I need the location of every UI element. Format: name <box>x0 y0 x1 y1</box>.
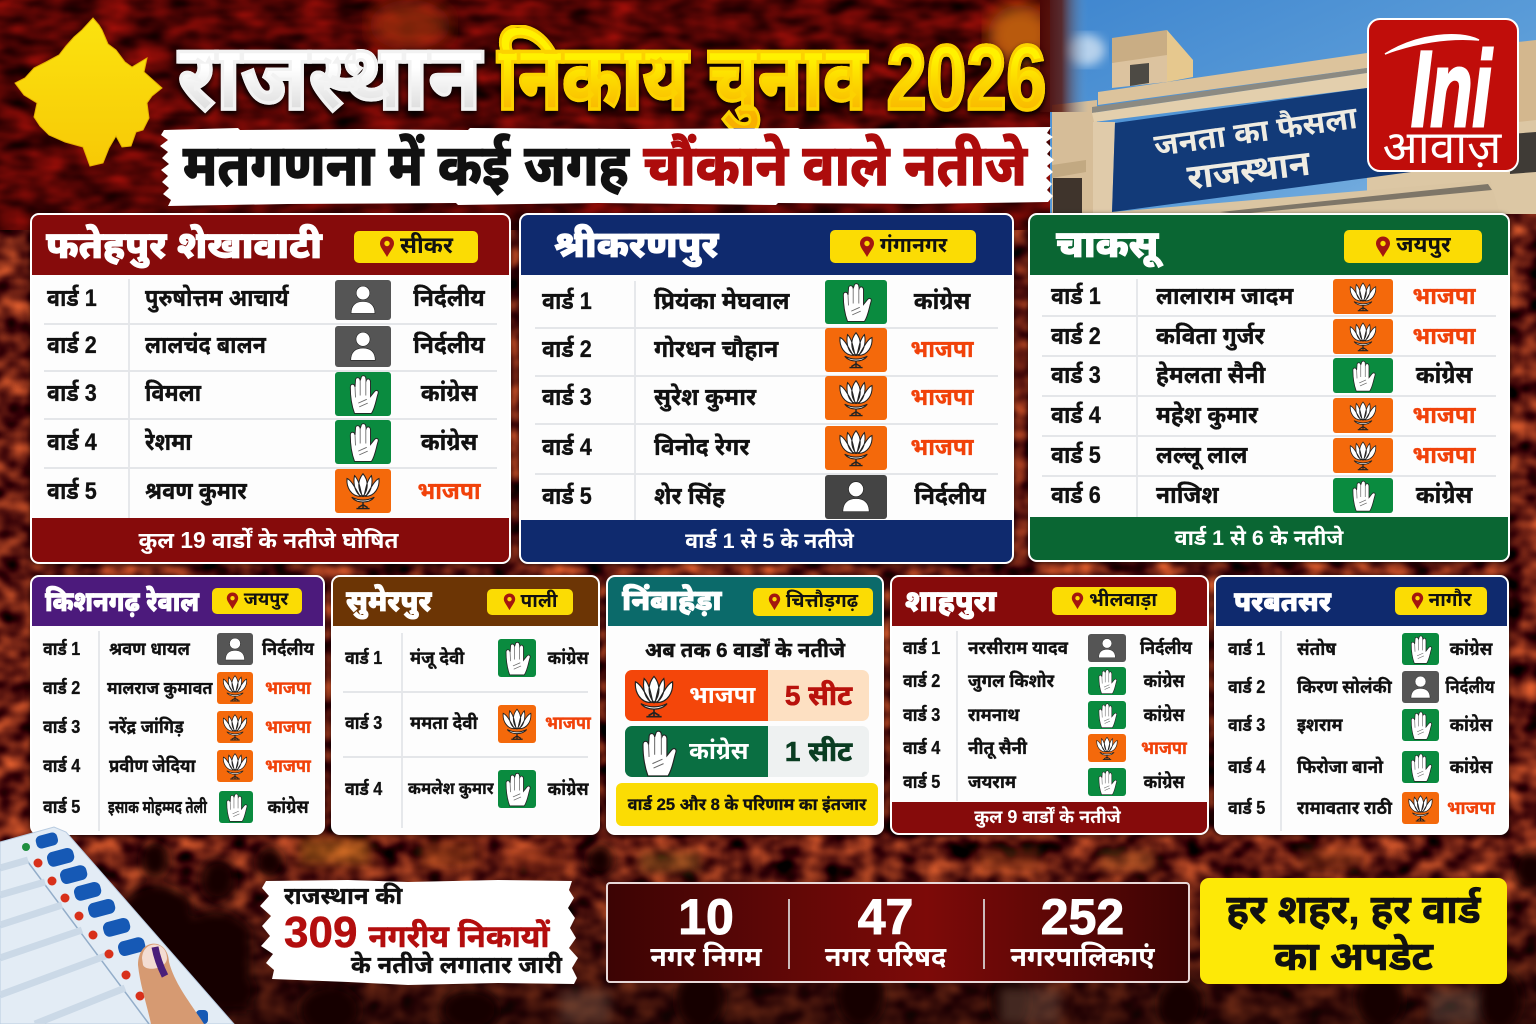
row: वार्ड 1 <box>1228 639 1265 659</box>
row: निर्दलीय <box>413 332 485 359</box>
stat: municipal corporations: 10 <box>678 889 734 945</box>
callout: every city every ward: हर शहर, हर वार्ड <box>1226 888 1481 932</box>
row: वार्ड 2 <box>903 671 940 691</box>
panel: Fatehpur Shekhawati <box>30 213 511 564</box>
row: सुरेश कुमार <box>654 384 756 411</box>
row: वार्ड 1 <box>542 288 592 315</box>
logo: Tni Awaaz: Ini <box>1411 30 1493 150</box>
footer: वार्ड 1 से 5 के नतीजे <box>685 529 854 553</box>
row: कमलेश कुमार <box>408 779 494 798</box>
stat: municipal corporations <box>608 884 804 972</box>
row <box>1228 709 1493 741</box>
row: कांग्रेस <box>1450 757 1492 777</box>
row: भाजपा <box>417 478 481 505</box>
row <box>46 372 478 416</box>
row <box>542 426 974 470</box>
row: वार्ड 2 <box>47 332 97 359</box>
row: श्रवण धायल <box>109 639 190 659</box>
row <box>42 750 312 782</box>
row: विमला <box>145 380 201 407</box>
row: कांग्रेस <box>547 779 589 799</box>
location tag: पाली <box>521 590 557 612</box>
row: वार्ड 2 <box>1228 677 1265 697</box>
location tag <box>212 588 302 614</box>
row: कांग्रेस <box>547 648 589 668</box>
row <box>902 701 1185 729</box>
row <box>46 280 486 320</box>
row <box>1050 398 1476 433</box>
callout: 309 urban bodies <box>260 880 578 985</box>
logo: Tni Awaaz <box>1367 18 1519 172</box>
row <box>1050 438 1476 473</box>
row: भाजपा <box>1447 798 1495 818</box>
pending note <box>616 783 878 826</box>
row: इसाक मोहम्मद तेली <box>108 797 207 817</box>
heading: निंबाहेड़ा <box>622 585 722 617</box>
row: निर्दलीय <box>1445 677 1495 697</box>
row <box>1228 633 1493 665</box>
row: भाजपा <box>1412 442 1476 469</box>
row: लल्लू लाल <box>1156 442 1247 469</box>
callout: 309 urban bodies: 309 नगरीय निकायों <box>284 908 550 957</box>
heading <box>1216 577 1507 626</box>
row <box>542 475 986 519</box>
row: जुगल किशोर <box>968 671 1054 691</box>
heading <box>608 577 882 626</box>
row: कांग्रेस <box>1416 482 1472 509</box>
row: वार्ड 4 <box>1228 757 1265 777</box>
stat: municipalities <box>980 884 1185 972</box>
heading <box>521 215 1012 275</box>
row <box>902 667 1185 695</box>
row <box>1050 279 1476 314</box>
row <box>42 791 309 823</box>
row: कांग्रेस <box>421 380 477 407</box>
row <box>42 672 312 704</box>
row: वार्ड 2 <box>1051 323 1101 350</box>
heading <box>32 577 323 626</box>
heading: श्रीकरणपुर <box>554 224 719 265</box>
BJP seats bar <box>625 670 869 721</box>
stat: municipal councils: 47 <box>858 889 913 945</box>
panel: Chaksu <box>1028 213 1510 562</box>
sign text: जनता का फैसला <box>1152 100 1360 163</box>
row: इशराम <box>1297 715 1343 735</box>
row: कविता गुर्जर <box>1156 323 1265 350</box>
row: भाजपा <box>265 678 311 698</box>
location tag: चित्तौड़गढ़ <box>786 590 858 612</box>
row: भाजपा <box>265 717 311 737</box>
row: वार्ड 5 <box>542 483 592 510</box>
row: भाजपा <box>1412 402 1476 429</box>
row: पुरुषोत्तम आचार्य <box>145 285 289 312</box>
row: कांग्रेस <box>267 797 309 817</box>
Congress seats bar: कांग्रेस <box>689 738 749 765</box>
row: वार्ड 4 <box>345 779 382 799</box>
stats box <box>606 882 1190 983</box>
heading: परबतसर <box>1234 586 1331 617</box>
row: वार्ड 4 <box>1051 402 1101 429</box>
location tag: गंगानगर <box>880 234 947 256</box>
row: निर्दलीय <box>914 483 986 510</box>
Congress seats bar: 1 सीट <box>785 736 852 767</box>
callout: every city every ward: का अपडेट <box>1274 935 1433 979</box>
background: sky and building with banner <box>1040 0 1536 214</box>
row: रेशमा <box>145 429 192 456</box>
location tag <box>487 589 573 615</box>
footer <box>521 520 1012 562</box>
callout: every city every ward <box>1200 878 1507 984</box>
row: वार्ड 4 <box>542 434 592 461</box>
row: गोरधन चौहान <box>654 336 778 363</box>
row: वार्ड 3 <box>1228 715 1265 735</box>
row: वार्ड 1 <box>47 285 97 312</box>
location tag: नागौर <box>1429 590 1471 610</box>
row <box>1228 671 1495 703</box>
panel: Sri Karanpur <box>519 213 1014 564</box>
location tag <box>1344 230 1482 263</box>
stat: municipal councils: नगर परिषद <box>825 942 946 972</box>
row <box>46 326 486 367</box>
row: कांग्रेस <box>1143 705 1185 725</box>
heading: शाहपुरा <box>905 585 996 618</box>
row: भाजपा <box>910 384 974 411</box>
row: नाजिश <box>1156 482 1219 509</box>
row <box>1228 751 1493 783</box>
row <box>344 705 592 743</box>
row: लालाराम जादम <box>1156 283 1293 310</box>
row <box>42 633 314 665</box>
row: वार्ड 1 <box>903 638 940 658</box>
heading: फतेहपुर शेखावाटी <box>46 224 322 266</box>
panel: Shahpura <box>890 575 1209 835</box>
row: प्रियंका मेघवाल <box>654 288 790 315</box>
location tag <box>1395 587 1487 615</box>
row: वार्ड 4 <box>47 429 97 456</box>
row: भाजपा <box>1141 738 1187 758</box>
subtitle banner: मतगणना में कई जगह चौंकाने वाले नतीजे <box>183 134 1027 198</box>
title: निकाय चुनाव 2026 <box>497 27 1046 129</box>
row: लालचंद बालन <box>145 332 266 359</box>
location tag: भीलवाड़ा <box>1089 590 1157 610</box>
row <box>46 420 478 464</box>
row: वार्ड 5 <box>1228 798 1265 818</box>
row: भाजपा <box>1412 283 1476 310</box>
location tag <box>753 588 873 616</box>
row <box>1228 792 1496 824</box>
row: कांग्रेस <box>1143 772 1185 792</box>
row: वार्ड 1 <box>345 648 382 668</box>
row: वार्ड 5 <box>47 478 97 505</box>
row <box>902 734 1188 762</box>
row: रामनाथ <box>968 705 1019 725</box>
footer <box>32 518 509 562</box>
row: कांग्रेस <box>1416 362 1472 389</box>
heading <box>333 577 598 626</box>
row: वार्ड 5 <box>43 797 80 817</box>
row <box>344 770 589 808</box>
heading: सुमेरपुर <box>346 585 432 618</box>
heading <box>1030 215 1508 275</box>
stat: municipalities: 252 <box>1041 889 1124 945</box>
BJP seats bar: भाजपा <box>689 682 755 709</box>
row: कांग्रेस <box>421 429 477 456</box>
row: कांग्रेस <box>1450 639 1492 659</box>
row: वार्ड 5 <box>903 772 940 792</box>
pending note: वार्ड 25 और 8 के परिणाम का इंतजार <box>628 795 866 814</box>
location tag: जयपुर <box>244 589 288 609</box>
row: वार्ड 5 <box>1051 442 1101 469</box>
row: नरसीराम यादव <box>968 638 1068 658</box>
stat: municipalities: नगरपालिकाएं <box>1010 942 1155 972</box>
row: वार्ड 6 <box>1051 482 1101 509</box>
panel: Sumerpur <box>331 575 600 835</box>
row: निर्दलीय <box>413 285 485 312</box>
row: निर्दलीय <box>262 639 314 659</box>
row <box>542 376 974 420</box>
row: वार्ड 1 <box>43 639 80 659</box>
sign text: राजस्थान <box>1185 144 1314 197</box>
row: कांग्रेस <box>914 288 970 315</box>
heading: चाकसू <box>1056 224 1158 266</box>
footer: वार्ड 1 से 6 के नतीजे <box>1175 526 1343 550</box>
title <box>173 24 1048 129</box>
row: वार्ड 2 <box>43 678 80 698</box>
row: संतोष <box>1297 639 1336 659</box>
row: प्रवीण जेदिया <box>109 756 195 776</box>
row: भाजपा <box>265 756 311 776</box>
row: वार्ड 2 <box>542 336 592 363</box>
heading <box>32 215 509 275</box>
row: नरेंद्र जांगिड़ <box>109 717 184 737</box>
location tag: जयपुर <box>1396 232 1451 257</box>
row: किरण सोलंकी <box>1297 677 1392 697</box>
footer <box>892 802 1207 833</box>
row: मंजू देवी <box>410 648 464 668</box>
row: हेमलता सैनी <box>1156 362 1265 389</box>
row: भाजपा <box>1412 323 1476 350</box>
row <box>42 711 312 743</box>
row: वार्ड 4 <box>43 756 80 776</box>
row: फिरोजा बानो <box>1297 757 1383 777</box>
icon: EVM machine with finger <box>0 826 235 1024</box>
location tag <box>354 231 478 263</box>
row: महेश कुमार <box>1156 402 1258 429</box>
stat: municipal corporations: नगर निगम <box>650 942 762 972</box>
callout: 309 urban bodies: राजस्थान की <box>284 883 402 910</box>
row: शेर सिंह <box>654 483 725 510</box>
row: भाजपा <box>545 713 591 733</box>
callout: 309 urban bodies: के नतीजे लगातार जारी <box>351 952 562 979</box>
row: भाजपा <box>910 336 974 363</box>
footer <box>1030 517 1508 560</box>
BJP seats bar: 5 सीट <box>785 680 852 711</box>
title: राजस्थान <box>178 27 481 129</box>
location tag <box>830 230 976 263</box>
row: वार्ड 4 <box>903 738 940 758</box>
row: श्रवण कुमार <box>145 478 247 505</box>
row <box>344 639 589 677</box>
row <box>1050 478 1473 513</box>
footer: कुल 9 वार्डों के नतीजे <box>974 807 1121 827</box>
row: वार्ड 3 <box>903 705 940 725</box>
row: वार्ड 3 <box>47 380 97 407</box>
row: वार्ड 3 <box>542 384 592 411</box>
row <box>902 634 1192 662</box>
heading: किशनगढ़ रेवाल <box>45 586 199 617</box>
row: नीतू सैनी <box>968 738 1027 758</box>
row: वार्ड 3 <box>1051 362 1101 389</box>
row: वार्ड 1 <box>1051 283 1101 310</box>
footer: कुल 19 वार्डों के नतीजे घोषित <box>138 527 399 553</box>
row <box>542 328 974 372</box>
Congress seats bar <box>625 726 869 777</box>
icon: Rajasthan map <box>14 17 163 167</box>
location tag <box>1052 587 1176 615</box>
row: कांग्रेस <box>1143 671 1185 691</box>
location tag: सीकर <box>400 232 453 258</box>
heading <box>892 577 1207 626</box>
sign text <box>1152 100 1360 197</box>
row: रामावतार राठी <box>1297 798 1392 818</box>
stat: municipal councils <box>788 884 983 972</box>
row: विनोद रेगर <box>654 434 750 461</box>
row: वार्ड 3 <box>345 713 382 733</box>
panel: Parbatsar <box>1214 575 1509 835</box>
row: ममता देवी <box>410 713 478 733</box>
row <box>902 768 1185 796</box>
row: मालराज कुमावत <box>107 678 213 698</box>
row: वार्ड 3 <box>43 717 80 737</box>
row: निर्दलीय <box>1140 638 1192 658</box>
row <box>542 280 971 324</box>
row: जयराम <box>968 772 1016 792</box>
panel: Nimbahera <box>606 575 884 835</box>
row <box>46 469 482 513</box>
results note: अब तक 6 वार्डों के नतीजे <box>645 639 845 662</box>
panel: Kishangarh Renwal <box>30 575 325 835</box>
row: भाजपा <box>910 434 974 461</box>
row: कांग्रेस <box>1450 715 1492 735</box>
row <box>1050 319 1476 354</box>
row <box>1050 358 1473 393</box>
